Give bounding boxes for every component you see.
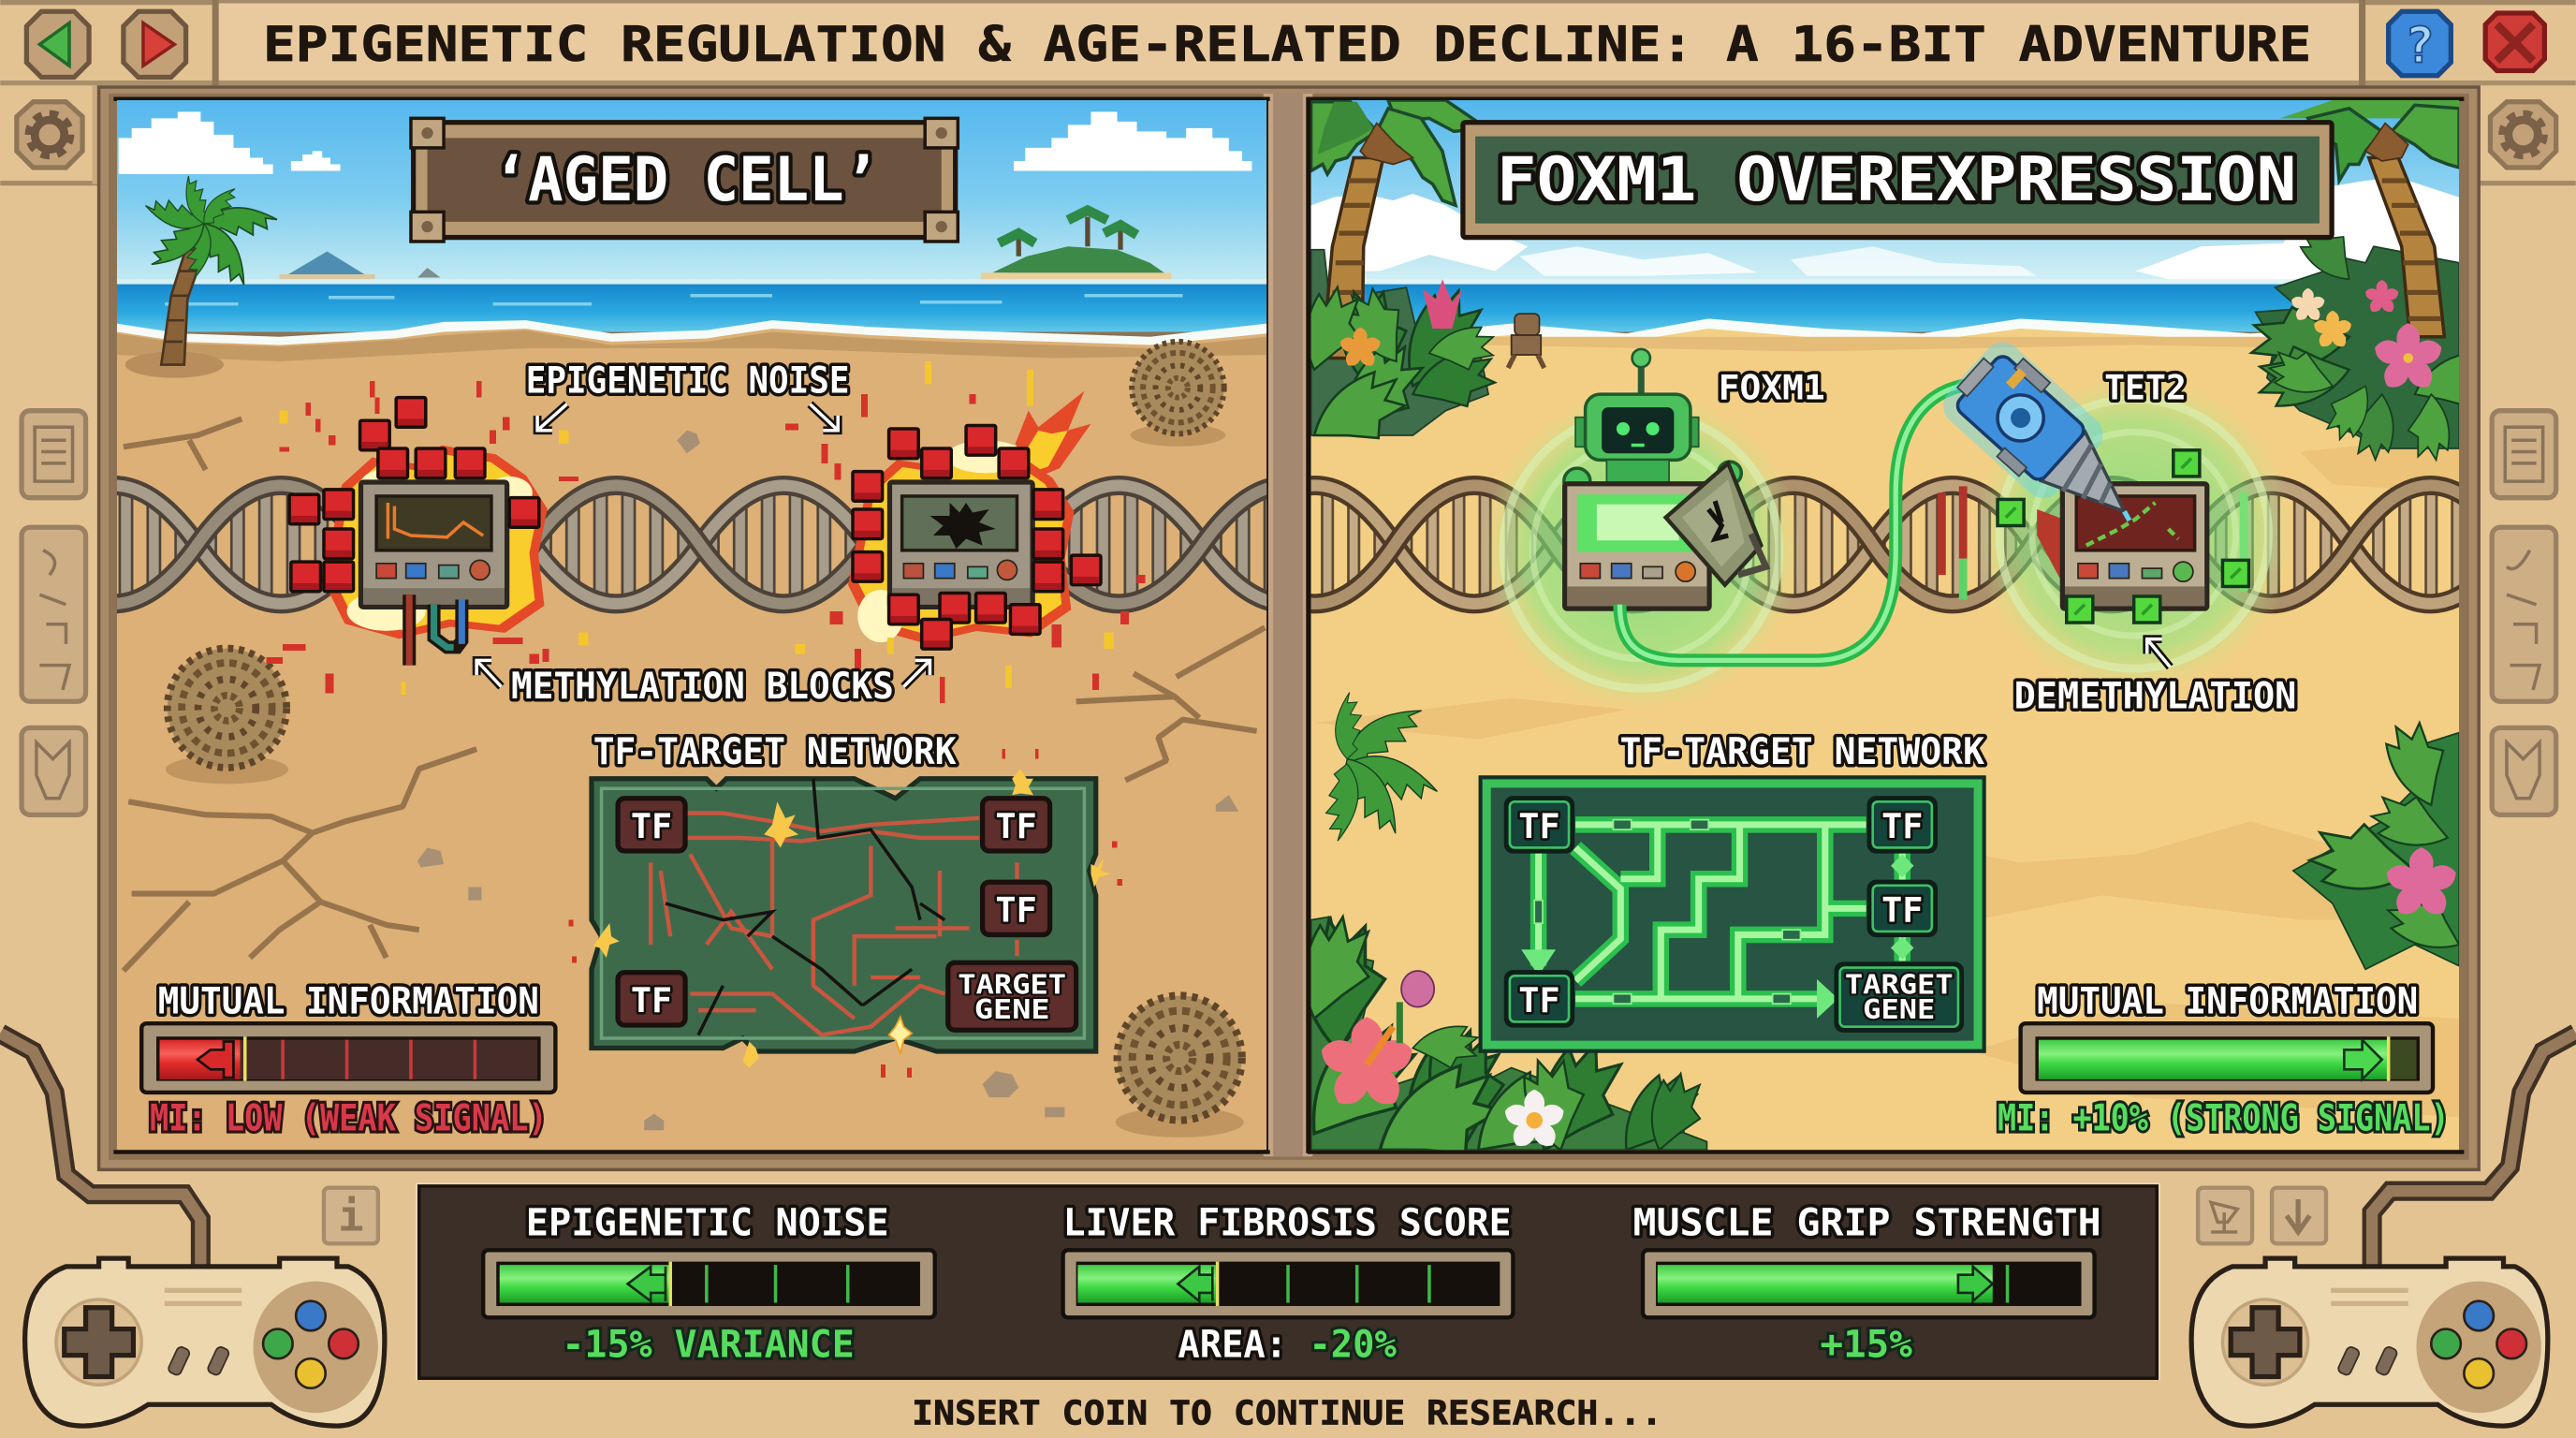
arrows: epigenetic noise: [537, 404, 838, 431]
right side rail: [2477, 102, 2576, 185]
sea: [117, 283, 1266, 331]
label: network: TF-TARGET NETWORK: [1619, 730, 1984, 773]
flower pink: [1423, 279, 1462, 329]
panel: damaged tf network: [568, 749, 1122, 1078]
stat: epigenetic noise: EPIGENETIC NOISE: [526, 1201, 889, 1245]
icon: forward button: [124, 11, 186, 77]
left palm tree: [1311, 100, 1486, 359]
icon: left gear: [17, 102, 82, 168]
label: tet2: TET2: [2104, 367, 2187, 407]
tet2 drill: [1935, 334, 2165, 554]
device: foxm1 machine: [1562, 481, 1712, 611]
methylation blocks: [287, 396, 1103, 651]
ground cracks: [124, 418, 1265, 971]
gauge: [2021, 1023, 2433, 1093]
explosion left: [267, 381, 588, 695]
lower right plants: [2293, 714, 2473, 969]
flowers on right bush: [2290, 280, 2445, 393]
bush left backing: [1311, 250, 1488, 435]
label: foxm1: FOXM1: [1719, 367, 1825, 407]
left side rail: [0, 85, 99, 185]
dna strand: [116, 476, 1267, 614]
tf nodes: TARGET: [1845, 970, 1954, 1001]
title: EPIGENETIC REGULATION & AGE-RELATED DECLINE: A 16-BIT ADVENTURE: [263, 17, 2311, 73]
plaque: aged cell: [411, 118, 958, 242]
icon: right gear: [2490, 102, 2556, 168]
stat: epigenetic noise: [483, 1201, 935, 1366]
broken shield: [1666, 463, 1766, 585]
demethylated blocks: [1996, 448, 2250, 624]
arrow: demethylation: [2147, 639, 2170, 667]
sparks: [568, 749, 1122, 1078]
controller cable right: [2372, 1034, 2576, 1269]
label: epigenetic noise: EPIGENETIC NOISE: [526, 359, 849, 402]
sky: [1311, 100, 2459, 285]
plaque: aged cell: ‘AGED CELL’: [493, 145, 879, 215]
clouds: [1311, 178, 2459, 279]
clouds: [119, 111, 1251, 174]
panel: aged cell scene: [116, 100, 1267, 1150]
controller left: [25, 1258, 385, 1426]
panel: foxm1 overexpression scene: [1236, 100, 2510, 1190]
mutual information high: [1998, 980, 2450, 1139]
explosion right: [785, 361, 1145, 703]
label: MUTUAL INFORMATION: [2037, 980, 2418, 1023]
device: right sequencer: [887, 479, 1035, 609]
pink bud: [1399, 971, 1434, 1043]
icon: back button: [26, 11, 89, 77]
sand: [117, 325, 1266, 1150]
icon: help button: ?: [2405, 18, 2435, 75]
face buttons: [263, 1301, 359, 1388]
character: [1508, 314, 1544, 368]
stat: muscle grip: MUSCLE GRIP STRENGTH: [1632, 1201, 2101, 1245]
tumbleweeds: [166, 342, 1244, 1137]
stat: liver fibrosis: AREA: -20%: [1178, 1322, 1397, 1366]
tf nodes: TF: [1518, 806, 1560, 846]
device: tet2 machine: [2037, 481, 2209, 611]
label: network: TF-TARGET NETWORK: [593, 730, 957, 773]
d-pad: [56, 1299, 141, 1385]
face buttons: [2431, 1301, 2526, 1388]
gauge: [141, 1023, 555, 1093]
right palm tree: [2280, 100, 2459, 337]
robot foxm1: [1564, 349, 1741, 494]
stat: muscle grip: +15%: [1821, 1322, 1913, 1366]
label: MUTUAL INFORMATION: [158, 980, 539, 1023]
green glow right: [1973, 373, 2295, 695]
arrows: methylation blocks: [476, 660, 929, 686]
bush right backing: [2256, 246, 2459, 448]
icon: close button: [2485, 13, 2544, 70]
hibiscus: [1317, 1017, 1417, 1112]
tf nodes: TF: [631, 980, 672, 1020]
stat: epigenetic noise: -15% VARIANCE: [562, 1322, 855, 1366]
controller right: [2191, 1258, 2548, 1426]
tf nodes: TF: [631, 806, 672, 846]
value: MI: LOW (WEAK SIGNAL): [150, 1096, 548, 1139]
rocks: [417, 431, 1238, 1130]
tf nodes: [1506, 799, 1961, 1030]
stat: muscle grip: [1632, 1201, 2101, 1366]
tf nodes: TF: [1518, 980, 1560, 1020]
flower orange: [1339, 328, 1383, 369]
tf nodes: TF: [995, 806, 1037, 846]
green cable: [1619, 385, 1969, 660]
device: left sequencer: [359, 479, 509, 666]
icon: plate a: [2198, 1188, 2252, 1243]
tf nodes: TARGET: [958, 970, 1066, 1001]
stat: liver fibrosis: [1063, 1201, 1513, 1366]
label: methylation blocks: METHYLATION BLOCKS: [511, 665, 894, 708]
panel titles: [411, 118, 2334, 242]
white flower: [1502, 1090, 1567, 1152]
sea: [1311, 283, 2459, 331]
palm tree: [125, 173, 279, 378]
bush left: [1293, 279, 1503, 465]
green glow left: [1480, 389, 1802, 712]
monitor frame: [99, 87, 2479, 1169]
top title bar: [0, 0, 2576, 85]
dna strand: [1236, 460, 2510, 624]
plaque: foxm1 overexpression: [1460, 120, 2334, 240]
icon: info plate: i: [338, 1191, 364, 1240]
controller cable left: [0, 1034, 200, 1269]
label: demethylation: DEMETHYLATION: [2014, 674, 2296, 717]
icon: help button: [2389, 11, 2451, 76]
icon: info plate: [324, 1188, 378, 1243]
panel: healthy tf network: [1480, 777, 1984, 1051]
bush right: [2247, 214, 2498, 462]
sky: [117, 100, 1266, 285]
d-pad: [2222, 1299, 2308, 1385]
side plates left: [22, 411, 86, 814]
tf nodes: GENE: [974, 994, 1050, 1025]
plaque: foxm1 overexpression: FOXM1 OVEREXPRESSION: [1497, 145, 2296, 215]
insert coin message: INSERT COIN TO CONTINUE RESEARCH...: [912, 1394, 1662, 1432]
lower left plants: [1287, 691, 1712, 1190]
distant islands: [280, 211, 1171, 279]
tf nodes: TF: [1881, 806, 1923, 846]
mutual information low: [141, 980, 555, 1139]
tf nodes: GENE: [1863, 994, 1935, 1025]
tf nodes: TF: [1881, 889, 1923, 930]
icon: plate b: [2272, 1188, 2326, 1243]
hibiscus right: [2383, 847, 2460, 920]
stats panel: [416, 1182, 2160, 1380]
side plates right: [2492, 411, 2556, 814]
tf nodes: [618, 799, 1076, 1030]
stat: liver fibrosis: LIVER FIBROSIS SCORE: [1063, 1201, 1512, 1245]
value: MI: +10% (STRONG SIGNAL): [1998, 1096, 2450, 1139]
sand: [1311, 325, 2459, 1150]
tf nodes: TF: [995, 889, 1037, 930]
